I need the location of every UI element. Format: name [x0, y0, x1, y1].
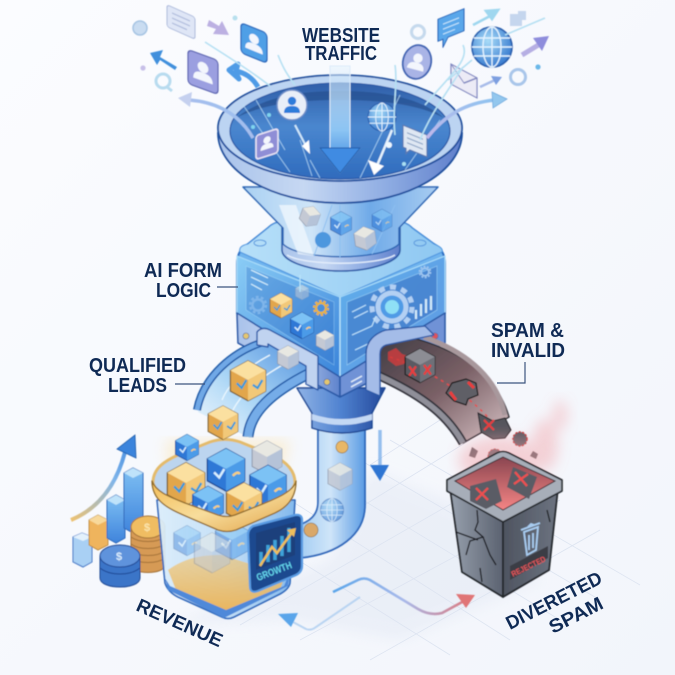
right chute: spam and invalid	[366, 326, 509, 443]
big curved arrow right	[427, 100, 495, 138]
icon: chat card	[167, 5, 195, 39]
label: spam and invalid	[491, 320, 565, 383]
label: revenue: REVENUE	[133, 595, 226, 652]
label: spam and invalid: INVALID	[491, 340, 565, 362]
icon: magnifier	[156, 74, 172, 91]
floor grid and shadow	[170, 420, 640, 660]
funnel cone	[243, 187, 438, 258]
icon: large gear	[372, 287, 412, 327]
big curved arrow left	[189, 100, 253, 138]
icon: ring	[412, 26, 424, 38]
revenue bucket	[152, 406, 296, 618]
icon: gold gear	[314, 301, 328, 315]
title: website traffic	[302, 24, 380, 65]
rejected trash bin	[447, 452, 562, 597]
upper funnel collar	[282, 228, 400, 271]
icon: person tile blue	[241, 23, 267, 63]
globe	[368, 103, 396, 131]
label: AI form logic: AI FORM	[144, 260, 222, 282]
label: AI form logic	[144, 260, 238, 302]
label: qualified leads	[89, 355, 205, 397]
gold rim front	[152, 481, 296, 532]
bin contents	[470, 467, 537, 509]
label: diverted spam: DIVERETED	[503, 568, 606, 634]
icon: person circle	[399, 42, 435, 82]
left face cubes	[270, 285, 334, 350]
large arrow down	[320, 66, 360, 173]
coin stacks	[100, 516, 165, 587]
down arrow beside pipe	[370, 430, 389, 481]
floor flow arrow	[278, 578, 475, 630]
person badge	[277, 90, 307, 120]
box lower band	[237, 313, 445, 397]
funnel rim	[218, 75, 462, 203]
growth panel: GROWTH	[255, 560, 294, 584]
icon: large globe	[472, 27, 512, 67]
flying icons right	[394, 9, 549, 140]
title: website traffic: WEBSITE	[302, 24, 380, 47]
label: qualified leads: LEADS	[108, 375, 167, 397]
bars and growth arrow	[71, 435, 143, 567]
icon: person tile lavender	[188, 50, 218, 94]
mini bars	[416, 296, 431, 319]
icon: chat blue	[438, 9, 464, 49]
rejected tag: REJECTED	[510, 554, 547, 579]
icon: ring blue	[510, 70, 526, 84]
arrows in funnel	[295, 125, 307, 148]
icon: arrow light	[473, 10, 498, 25]
label: qualified leads: QUALIFIED	[89, 355, 186, 377]
flying icons left	[133, 5, 295, 138]
chat card	[403, 125, 427, 162]
pipe to revenue bucket	[296, 430, 365, 558]
thin arrow	[205, 42, 295, 86]
label: spam and invalid: SPAM &	[491, 320, 564, 342]
lower collar	[297, 388, 385, 433]
trash bin smoke	[458, 400, 567, 484]
icon: envelope	[451, 64, 477, 98]
icon: left face gear	[250, 297, 266, 313]
person tile	[256, 128, 278, 160]
thin streaks	[394, 18, 545, 140]
cracks	[456, 510, 550, 582]
curved arrow	[229, 64, 258, 87]
processing box: AI form logic	[237, 222, 445, 377]
title: website traffic: TRAFFIC	[305, 42, 377, 65]
icon: arrow small purple	[207, 20, 229, 35]
left chute: qualified leads	[197, 328, 318, 438]
label: diverted spam: SPAM	[546, 593, 607, 638]
coin stacks: $	[116, 551, 122, 563]
coin stacks: $	[144, 522, 150, 534]
bucket cubes	[167, 406, 286, 523]
icon: small globe	[133, 21, 147, 35]
growth panel	[248, 515, 302, 592]
falling spam debris	[469, 413, 538, 463]
icon: blue arrow up left	[150, 50, 177, 70]
icon: puzzle	[510, 11, 526, 26]
icon: trash can	[521, 523, 540, 555]
label: AI form logic: LOGIC	[156, 280, 211, 302]
icon: arrow purple	[522, 44, 540, 55]
icon: small gear	[420, 266, 430, 278]
icon: arrow lilac	[480, 80, 495, 87]
items inside funnel	[243, 90, 440, 178]
